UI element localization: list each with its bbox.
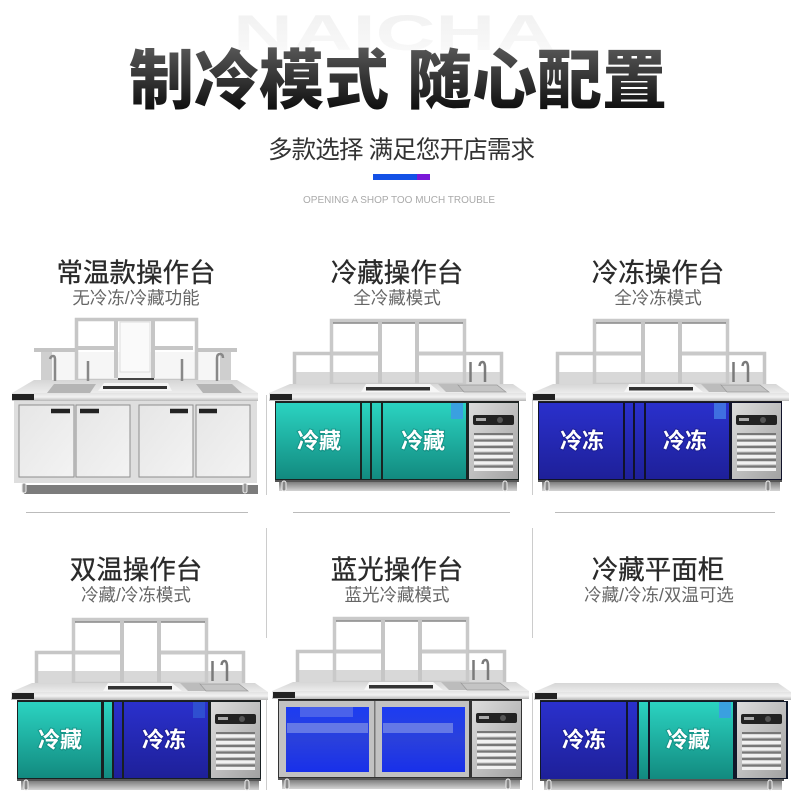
title: 制冷模式 随心配置	[129, 44, 667, 117]
heading: dual temperature station: 双温操作台	[70, 555, 202, 585]
door label: 冷藏	[38, 728, 82, 752]
sub heading: freezer station: 全冷冻模式	[614, 288, 702, 308]
watermark: NAICHA: NAICHA	[233, 5, 555, 61]
door label: 冷冻	[560, 428, 604, 454]
heading: flat cabinet: 冷藏平面柜	[592, 555, 724, 585]
product: freezer station	[532, 320, 789, 491]
product: ambient station	[12, 320, 258, 494]
sub heading: blue light station: 蓝光冷藏模式	[344, 585, 450, 605]
product: refrigerated station	[269, 320, 526, 491]
heading: blue light station: 蓝光操作台	[331, 555, 463, 585]
heading: refrigerated station: 冷藏操作台	[331, 258, 463, 288]
product: dual temperature station	[11, 620, 268, 790]
sub heading: dual temperature station: 冷藏/冷冻模式	[81, 585, 191, 605]
sub heading: flat cabinet: 冷藏/冷冻/双温可选	[584, 585, 734, 605]
sub heading: ambient station: 无冷冻/冷藏功能	[72, 288, 200, 308]
product: flat cabinet	[534, 683, 791, 790]
heading: freezer station: 冷冻操作台	[592, 258, 724, 288]
accent bar	[373, 174, 430, 180]
door label: 冷冻	[663, 428, 707, 454]
sub heading: refrigerated station: 全冷藏模式	[353, 288, 441, 308]
product: blue light station	[272, 618, 529, 789]
door label: 冷藏	[401, 428, 445, 454]
door label: 冷冻	[142, 728, 186, 752]
door label: 冷藏	[666, 728, 710, 752]
subtitle: 多款选择 满足您开店需求	[268, 136, 535, 164]
door label: 冷冻	[562, 728, 606, 752]
English tagline: OPENING A SHOP TOO MUCH TROUBLE	[303, 194, 495, 206]
heading: ambient station: 常温款操作台	[56, 258, 216, 288]
door label: 冷藏	[297, 428, 341, 454]
